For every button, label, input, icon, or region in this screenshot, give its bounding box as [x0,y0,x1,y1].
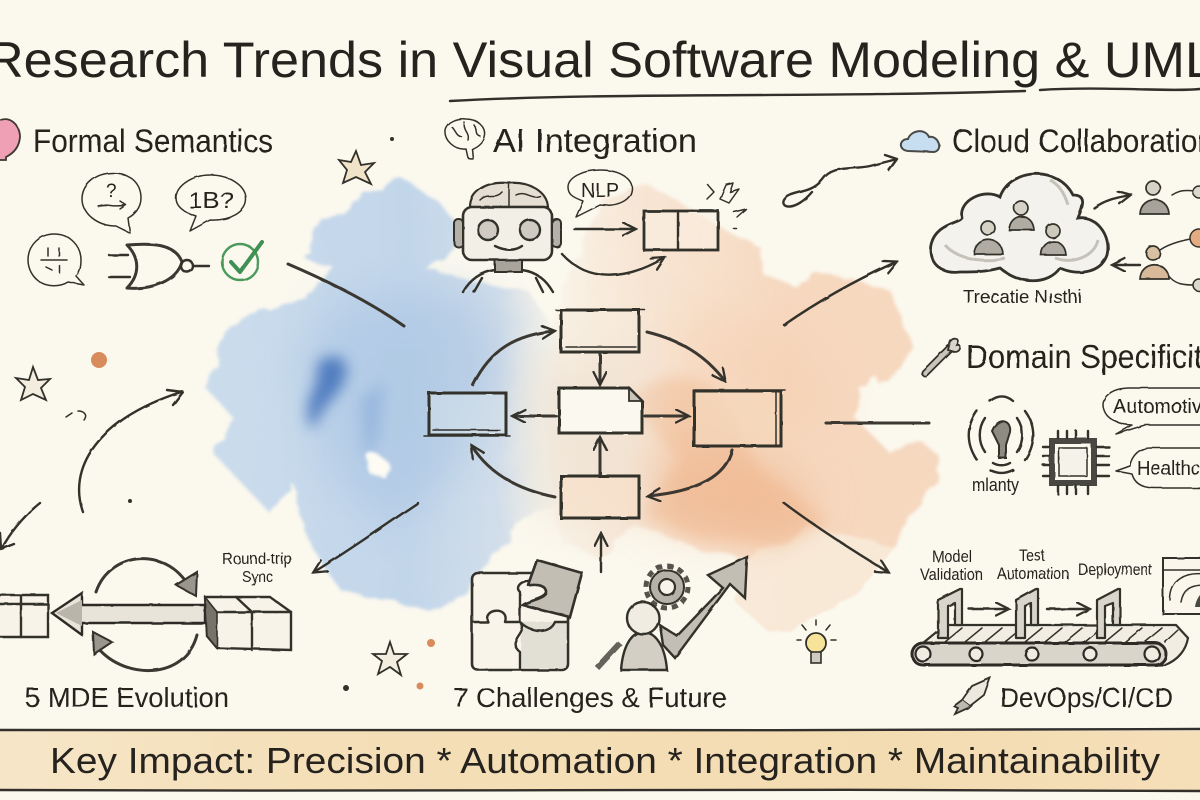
speech bubble: Healthcare [1116,448,1200,488]
big arrow [52,593,205,635]
icon: robot [454,183,561,292]
speech bubble: question: ? [106,181,117,202]
speech bubble: numbers: 1B? [188,187,234,213]
icon: green check [222,242,262,280]
central diagram [424,310,785,572]
panel: MDE evolution [0,551,292,713]
label: round-trip sync [222,551,292,586]
heading: challenges and future: 7 Challenges & Future [453,682,727,713]
box: centre document [559,388,642,433]
icon: dashboard window [1163,558,1200,614]
icon: small cloud [901,131,939,152]
panel: formal semantics [0,119,273,288]
sync arrows [93,559,197,671]
heading: DevOps: DevOps/CI/CD [1000,682,1173,713]
icon: light bulb [797,620,836,663]
speech bubble: fraction [28,234,84,286]
heading: MDE evolution: 5 MDE Evolution [25,682,229,713]
decorative stars and dots [16,137,435,691]
box: top [556,310,645,352]
arrows: cloud exchange [1094,195,1140,265]
labels: pipeline stages: Automation [997,564,1069,583]
speech bubble: NLP: NLP [581,180,619,202]
arrows into box [562,229,664,275]
box: model [644,211,718,250]
icon: person with gear and arrow [597,557,747,670]
label: mlanty: mlanty [972,475,1019,495]
label: round-trip sync: Round-trip [222,551,292,568]
cloud caption: Trecatie Nısthi [963,287,1082,307]
labels: pipeline stages: Deployment [1078,560,1152,579]
cycle arrows [472,331,732,497]
gates [938,589,1120,638]
box: bottom [561,476,639,518]
label: round-trip sync: Sync [242,569,273,586]
heading: formal semantics: Formal Semantics [33,123,273,159]
heading: AI integration: AI Integration [493,122,697,159]
title: Research Trends in Visual Software Modeling & UML [0,32,1200,88]
icon: large cloud with people [930,174,1108,281]
banner: key impact [0,729,1200,791]
icon: chip [1043,431,1109,494]
panel: cloud collaboration [901,123,1200,307]
cross arrows [513,353,688,572]
panel: challenges and future [453,557,747,713]
labels: pipeline stages: Test [1019,546,1045,565]
icon: antenna signal [969,396,1033,473]
box: right [694,390,785,446]
icon: brain outline [445,119,485,159]
user network [1140,181,1200,291]
banner: key impact: Key Impact: Precision * Automation * Integration * Maintainability [50,740,1160,781]
labels: pipeline stages: Validation [920,565,983,584]
icon: left box [0,595,48,637]
speech bubble: Automotive [1103,388,1200,434]
watercolor wash: blue and orange [208,177,940,632]
icon: puzzle [472,560,582,670]
radial arrows [0,155,929,572]
speech bubble: NLP [568,170,632,217]
box: left [424,393,510,436]
arrows: stages [969,608,1089,610]
labels: pipeline stages [920,546,1152,584]
panel: AI integration [445,119,746,292]
speech bubble: numbers [176,175,246,231]
icon: rocket [954,678,990,714]
icon: conveyor belt [912,625,1188,665]
spark marks [707,183,746,228]
icon: logic gate [109,244,209,288]
panel: devops CI/CD [912,546,1200,714]
panel: domain specificity [925,338,1200,495]
icon: brain [0,119,20,160]
labels: pipeline stages: Model [932,547,972,566]
icon: wrench [925,339,960,373]
icon: right box [205,597,291,650]
speech bubble: question [82,173,141,233]
